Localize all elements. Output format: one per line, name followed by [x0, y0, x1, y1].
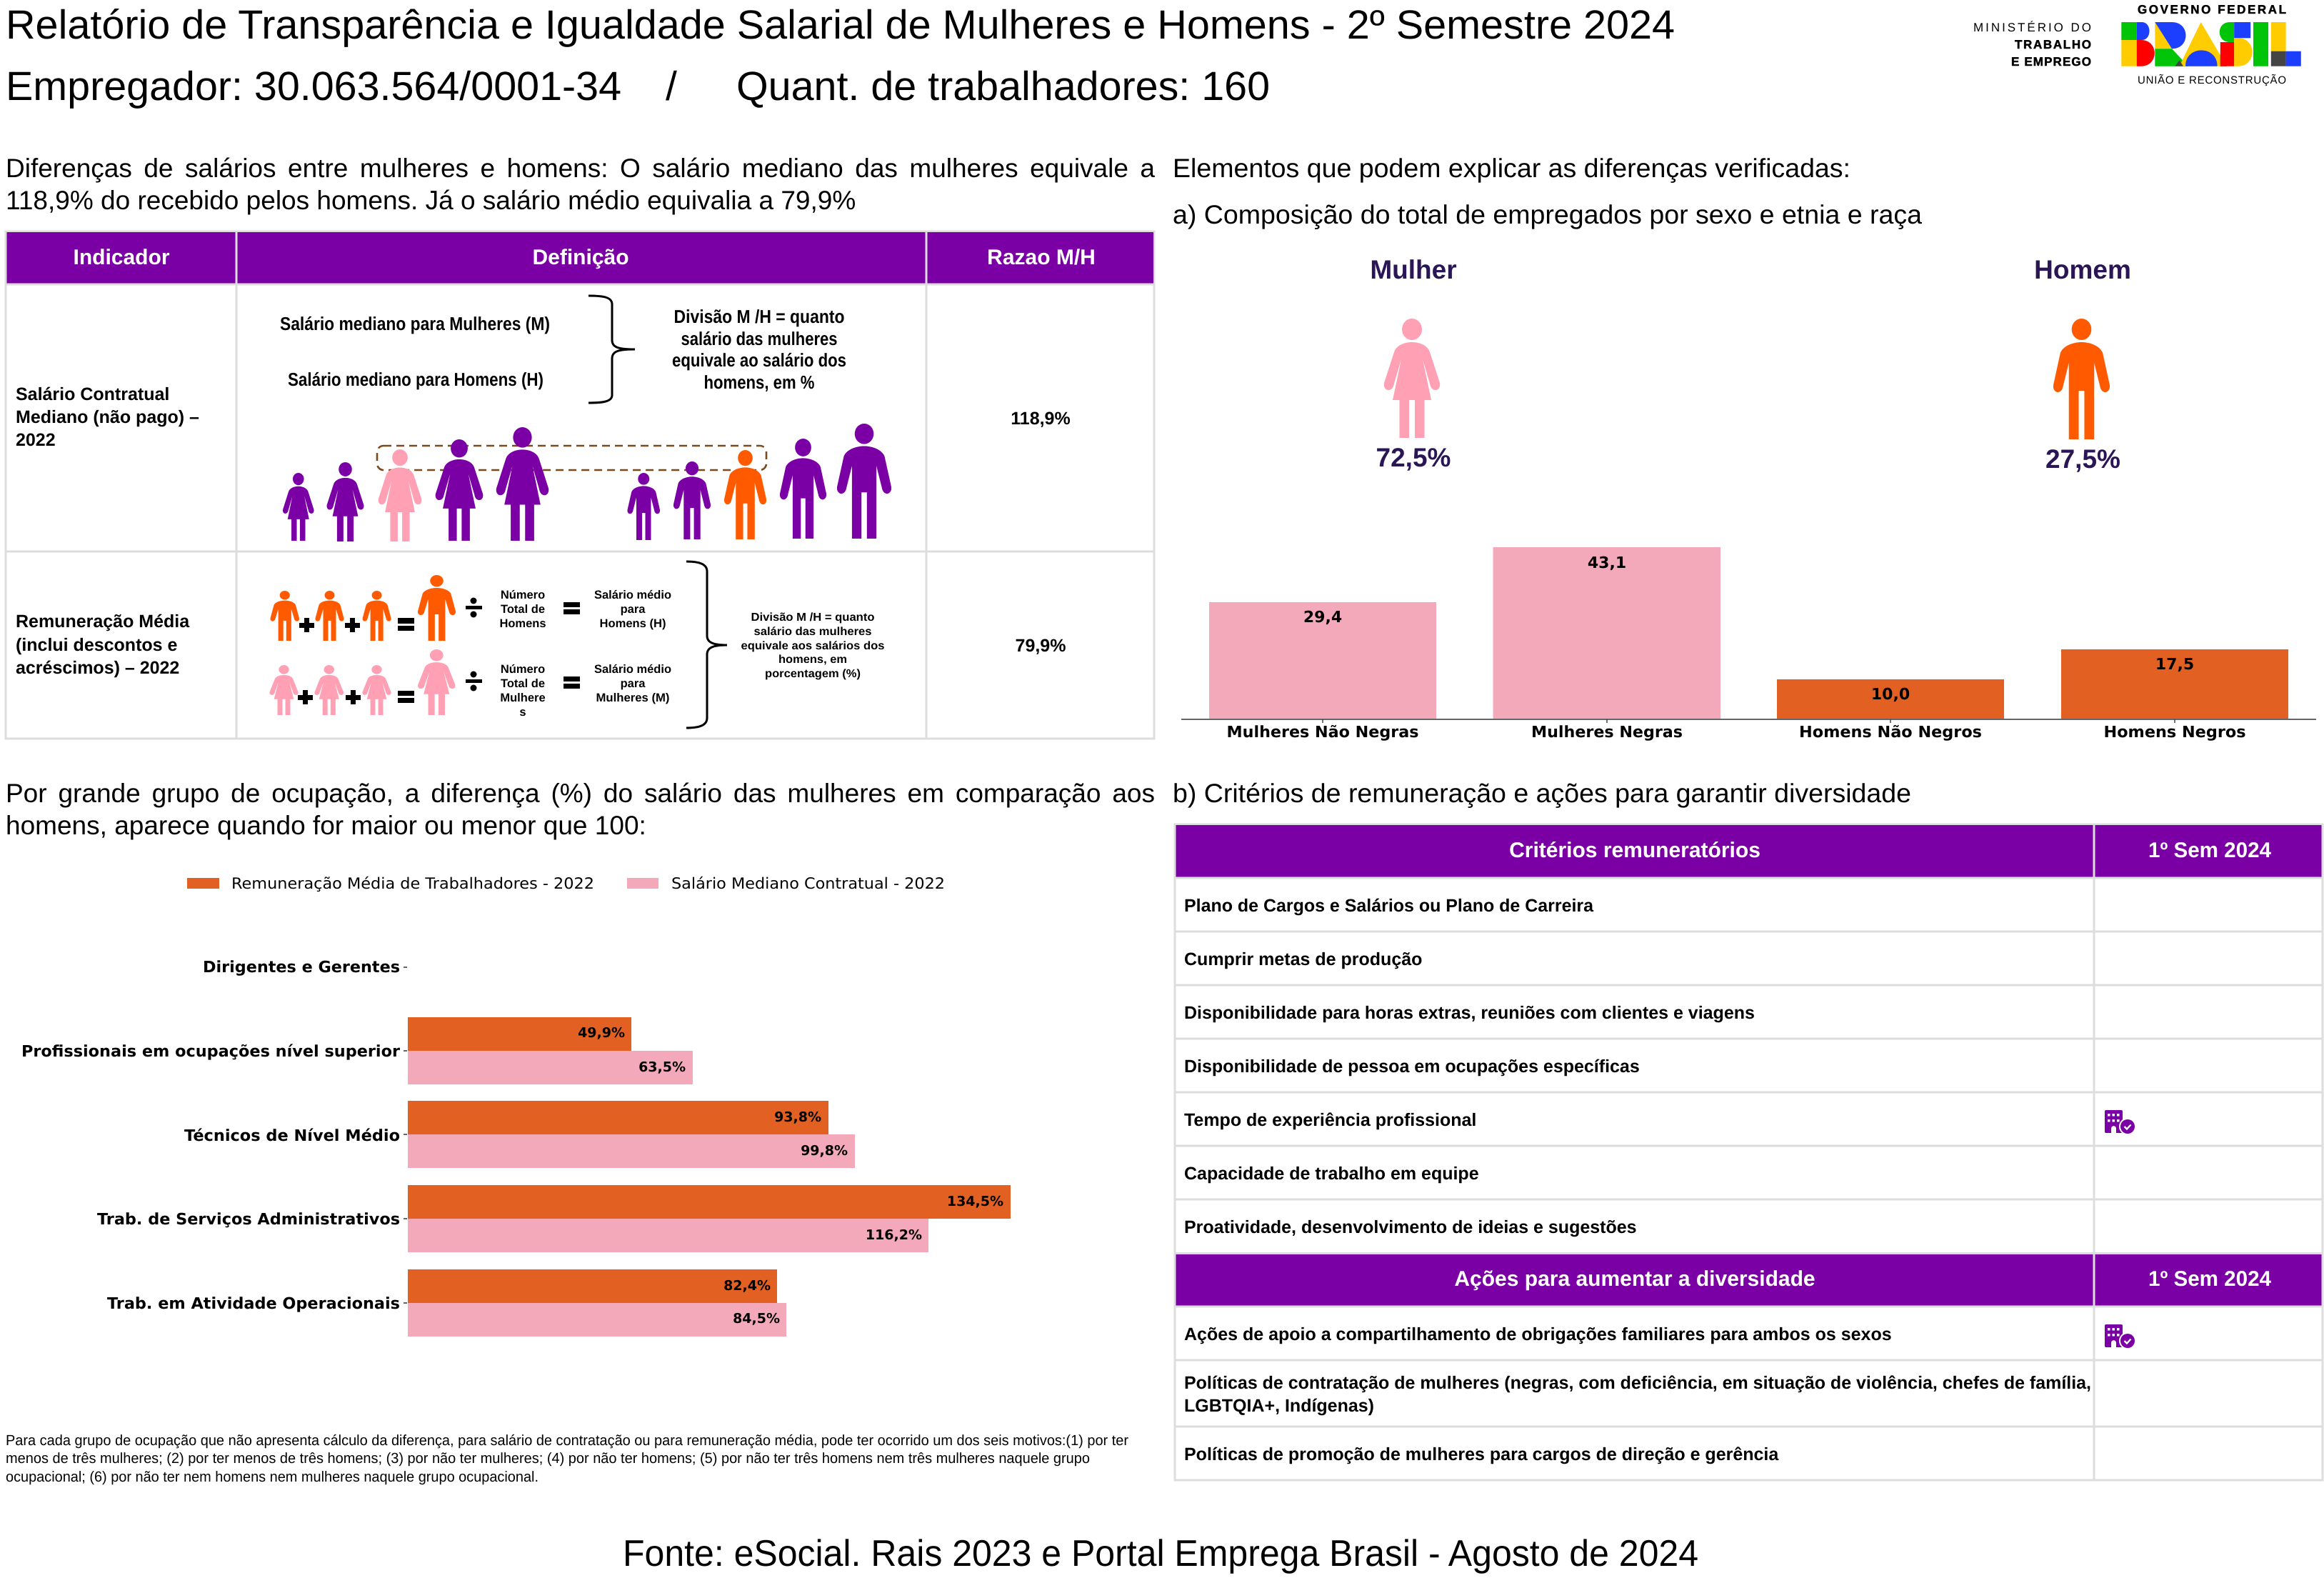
- header: ações: 1º Sem 2024: [2148, 1267, 2271, 1291]
- row label: remuneração média: [16, 611, 190, 678]
- subtitle: employer and workers: /: [666, 64, 677, 109]
- rows: critérios: Tempo de experiência profissional: [1184, 1110, 1476, 1130]
- definition: salário mediano text: [280, 313, 550, 390]
- bar values: [578, 1025, 1003, 1327]
- header: critérios: [1509, 839, 2271, 862]
- bar chart: sexo e raça: Mulheres Não Negras: [1227, 724, 1418, 741]
- subtitle: employer and workers: Empregador: 30.063.564/0001-34: [6, 64, 621, 109]
- icon: building check: [2105, 1324, 2136, 1349]
- bar chart: sexo e raça: Mulheres Negras: [1531, 724, 1683, 741]
- formula: mulheres: [269, 649, 671, 719]
- footnote: menos de três mulheres; (2) por ter menos de três homens; (3) por não ter mulheres; (4) por não ter homens; (5) por não ter três homens nem três mulheres naquele grupo: [6, 1450, 1090, 1467]
- logo: ministério: TRABALHO: [2015, 38, 2091, 51]
- definition: salário mediano text: Salário mediano para Homens (H): [288, 369, 544, 390]
- formula: homens: Total de: [501, 603, 545, 616]
- rows: ações: Ações de apoio a compartilhamento de obrigações familiares para ambos os sexos: [1184, 1324, 1892, 1344]
- logo: ministério: [1973, 21, 2091, 69]
- row label: remuneração média: (inclui descontos e: [16, 635, 178, 655]
- panel: homem: 27,5%: [2045, 444, 2120, 474]
- definition: divisão mediano: salário das mulheres: [681, 328, 837, 349]
- bar values: 93,8%: [774, 1109, 821, 1125]
- table header: Indicador: [73, 246, 170, 269]
- rows: ações: LGBTQIA+, Indígenas): [1184, 1396, 1374, 1416]
- definition: divisão mediano: Divisão M /H = quanto: [674, 306, 844, 327]
- legend: Salário Mediano Contratual - 2022: [671, 875, 945, 893]
- brace: média: [686, 561, 727, 728]
- heading: elementos: Elementos que podem explicar as diferenças verificadas:: [1173, 154, 1850, 183]
- row label: salário contratual: [16, 384, 199, 450]
- brace: mediano: [588, 296, 635, 403]
- row label: salário contratual: 2022: [16, 430, 56, 450]
- heading: composição: a) Composição do total de empregados por sexo e etnia e raça: [1173, 200, 1922, 229]
- header: ações: [1454, 1267, 2271, 1291]
- panel: mulher: [1370, 255, 1457, 472]
- rows: ações: [1184, 1324, 2091, 1464]
- bar values: 84,5%: [733, 1311, 780, 1327]
- bar values: 116,2%: [866, 1227, 922, 1243]
- header: critérios: 1º Sem 2024: [2148, 839, 2271, 862]
- row label: remuneração média: Remuneração Média: [16, 611, 190, 631]
- definition: divisão média: equivale aos salários dos: [741, 640, 885, 652]
- header: critérios: Critérios remuneratórios: [1509, 839, 1760, 862]
- bar chart: sexo e raça: Homens Não Negros: [1799, 724, 1982, 741]
- formula: mulheres: s: [519, 706, 526, 719]
- legend: [187, 875, 945, 893]
- value: 79,9%: 79,9%: [1016, 636, 1066, 656]
- dashed median box: [377, 446, 766, 470]
- rows: critérios: Disponibilidade para horas extras, reuniões com clientes e viagens: [1184, 1003, 1755, 1023]
- value: 118,9%: 118,9%: [1011, 409, 1071, 429]
- row label: salário contratual: Salário Contratual: [16, 384, 169, 404]
- text block: diferenças de salários: Diferenças de salários entre mulheres e homens: O salário mediano das mulheres equivale a: [6, 154, 1155, 183]
- table header: Definição: [532, 246, 629, 269]
- definition: divisão média: [741, 611, 885, 680]
- rows: ações: Políticas de promoção de mulheres para cargos de direção e gerência: [1184, 1444, 1779, 1464]
- rows: critérios: [1184, 896, 1755, 1237]
- formula: mulheres: para: [621, 677, 646, 690]
- rows: critérios: Disponibilidade de pessoa em ocupações específicas: [1184, 1057, 1640, 1077]
- icons: homens ordenados: [627, 424, 891, 540]
- bars: [408, 1017, 1011, 1303]
- panel: tabela de critérios: [1175, 824, 2323, 1480]
- panel: mulher: 72,5%: [1376, 443, 1451, 472]
- formula: mulheres: Mulhere: [500, 691, 546, 704]
- bar values: 63,5%: [638, 1059, 686, 1075]
- formula: mulheres: Mulheres (M): [596, 691, 670, 704]
- table header: Razao M/H: [987, 246, 1096, 269]
- text block: diferenças de salários: 118,9% do recebido pelos homens. Já o salário médio equivalia a 79,9%: [6, 186, 856, 215]
- logo: ministério: E EMPREGO: [2011, 55, 2091, 69]
- y axis labels: Profissionais em ocupações nível superior: [21, 1043, 400, 1061]
- formula: homens: Salário médio: [594, 589, 671, 601]
- rows: critérios: Cumprir metas de produção: [1184, 949, 1422, 969]
- formula: mulheres: Número: [501, 663, 545, 676]
- panel: homem: [2034, 255, 2131, 474]
- formula: homens: Homens (H): [600, 617, 666, 630]
- row label: salário contratual: Mediano (não pago) –: [16, 407, 199, 427]
- bar chart: sexo e raça: Homens Negros: [2104, 724, 2245, 741]
- footnote: ocupacional; (6) por não ter nem homens nem mulheres naquele grupo ocupacional.: [6, 1469, 539, 1485]
- bar chart: sexo e raça: [1181, 547, 2316, 741]
- panel: tabela de indicadores: [6, 231, 1154, 739]
- definition: divisão média: homens, em: [778, 654, 847, 666]
- y axis labels: Dirigentes e Gerentes: [203, 959, 400, 977]
- formula: mulheres: Salário médio: [594, 663, 671, 676]
- y axis labels: Trab. de Serviços Administrativos: [97, 1211, 400, 1229]
- text block: grande grupo de ocupação: [6, 779, 1155, 840]
- formula: homens: [270, 575, 671, 641]
- rows: ações: Políticas de contratação de mulheres (negras, com deficiência, em situação de violência, chefes de família,: [1184, 1373, 2091, 1393]
- bar values: 82,4%: [723, 1278, 771, 1294]
- header: ações: Ações para aumentar a diversidade: [1454, 1267, 1815, 1291]
- formula: homens: Homens: [499, 617, 546, 630]
- bar chart: sexo e raça: 10,0: [1871, 686, 1910, 704]
- bar chart: sexo e raça: 17,5: [2155, 656, 2194, 674]
- rows: critérios: Capacidade de trabalho em equipe: [1184, 1164, 1479, 1184]
- text block: grande grupo de ocupação: homens, aparece quando for maior ou menor que 100:: [6, 811, 646, 840]
- icon: building check: [2105, 1110, 2136, 1135]
- formula: mulheres: Total de: [501, 677, 545, 690]
- row label: remuneração média: acréscimos) – 2022: [16, 658, 179, 678]
- footnote: [6, 1432, 1128, 1485]
- text block: grande grupo de ocupação: Por grande grupo de ocupação, a diferença (%) do salário das mulheres em comparação aos: [6, 779, 1155, 808]
- bar values: 49,9%: [578, 1025, 625, 1041]
- panel: mulher: Mulher: [1370, 255, 1457, 284]
- y axis labels: Técnicos de Nível Médio: [184, 1127, 400, 1145]
- logo: governo federal brasil: GOVERNO FEDERAL: [2138, 3, 2286, 16]
- text block: diferenças de salários: [6, 154, 1155, 215]
- bar values: 99,8%: [801, 1143, 848, 1159]
- definition: divisão mediano: equivale ao salário dos: [672, 349, 846, 371]
- formula: homens: Número: [501, 589, 545, 601]
- y axis labels: Trab. em Atividade Operacionais: [107, 1295, 400, 1313]
- bar values: 134,5%: [947, 1194, 1003, 1209]
- definition: divisão média: salário das mulheres: [754, 626, 872, 638]
- logo: governo federal brasil: [2121, 3, 2301, 86]
- bar chart: sexo e raça: 29,4: [1303, 609, 1342, 626]
- definition: divisão mediano: [672, 306, 846, 393]
- bar chart: sexo e raça: 43,1: [1588, 554, 1626, 572]
- definition: salário mediano text: Salário mediano para Mulheres (M): [280, 313, 550, 334]
- definition: divisão média: porcentagem (%): [765, 668, 861, 680]
- definition: divisão mediano: homens, em %: [704, 371, 814, 393]
- definition: divisão média: Divisão M /H = quanto: [751, 611, 875, 624]
- panel: homem: Homem: [2034, 255, 2131, 284]
- rows: critérios: Plano de Cargos e Salários ou Plano de Carreira: [1184, 896, 1594, 916]
- footnote: Para cada grupo de ocupação que não apresenta cálculo da diferença, para salário de contratação ou para remuneração média, pode ter ocorrido um dos seis motivos:(1) por ter: [6, 1432, 1128, 1449]
- legend: Remuneração Média de Trabalhadores - 2022: [231, 875, 594, 893]
- chart: salário por grande grupo de ocupação: [21, 875, 1011, 1337]
- rows: critérios: Proatividade, desenvolvimento de ideias e sugestões: [1184, 1217, 1637, 1237]
- formula: homens: para: [621, 603, 646, 616]
- subtitle: employer and workers: [6, 64, 1270, 109]
- logo: governo federal brasil: UNIÃO E RECONSTRUÇÃO: [2138, 74, 2286, 86]
- heading: critérios: b) Critérios de remuneração e ações para garantir diversidade: [1173, 779, 1911, 808]
- logo: ministério: MINISTÉRIO DO: [1973, 21, 2091, 34]
- subtitle: employer and workers: Quant. de trabalhadores: 160: [736, 64, 1270, 109]
- title: Relatório de Transparência e Igualdade Salarial de Mulheres e Homens - 2º Semestre 2024: [6, 2, 1675, 48]
- table header: [73, 246, 1096, 269]
- y axis labels: [21, 959, 400, 1313]
- icons: mulheres ordenadas: [283, 427, 549, 541]
- source: Fonte: eSocial. Rais 2023 e Portal Emprega Brasil - Agosto de 2024: [623, 1533, 1698, 1574]
